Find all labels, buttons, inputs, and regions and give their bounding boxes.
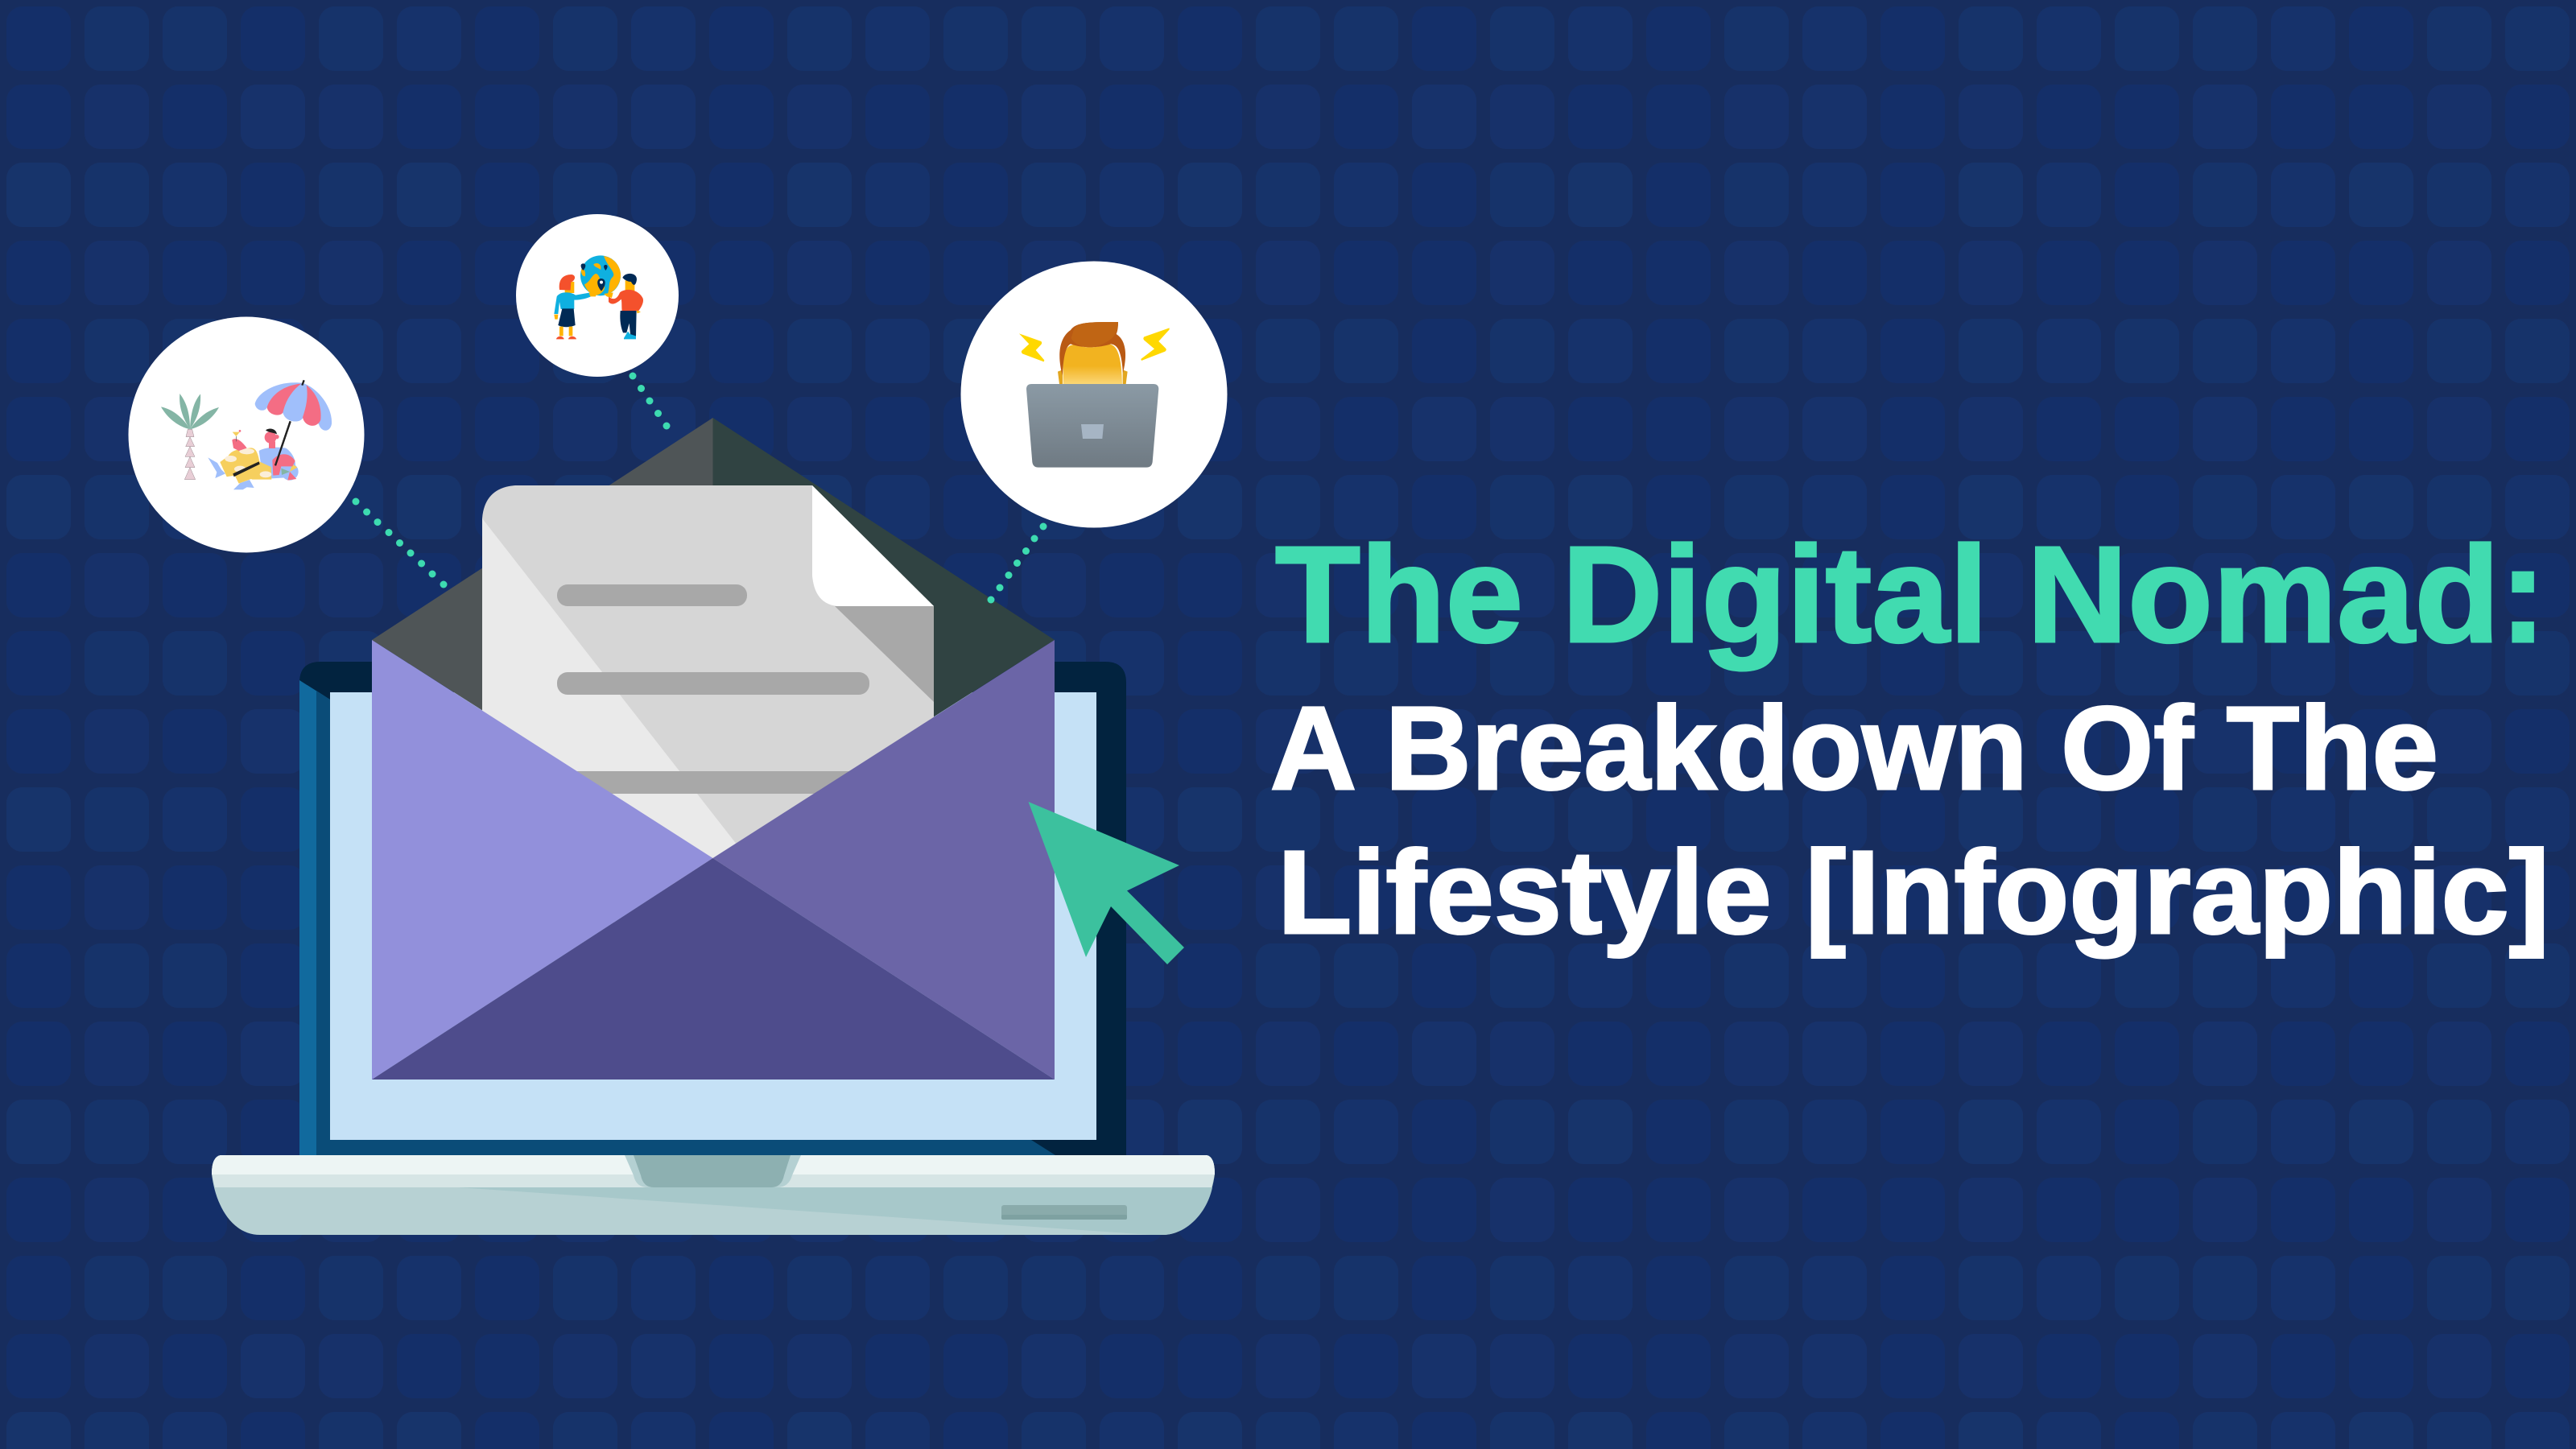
reclining man [208,421,299,489]
envelope back flap [372,418,1055,857]
icon: two people and a globe [554,255,643,339]
envelope front flaps [372,640,1055,1080]
palm tree [161,394,219,480]
title line 2: A Breakdown Of The [1270,683,2438,815]
icon: stressed worker [1019,322,1170,468]
title line 1: The Digital Nomad: [1275,518,2546,671]
laptop screen bezel [299,662,1126,1155]
dotted connector: right [987,523,1046,604]
globe [580,255,621,295]
dotted connector: left [353,497,448,588]
laptop illustration [212,662,1215,1235]
icon: palm and man under umbrella [161,380,332,489]
worker laptop [1026,384,1158,468]
lightning bolts [1019,328,1170,361]
icon: laptop worker circle [961,261,1227,528]
dotted connector: middle [630,372,670,430]
worker head [1058,322,1128,384]
title [1270,518,2549,959]
title line 3: Lifestyle [Infographic] [1278,827,2549,959]
beach umbrella [255,380,332,465]
envelope [372,418,1055,1080]
laptop left side bands [299,680,1055,1155]
man [604,274,643,339]
cursor arrow [1029,802,1184,964]
woman [554,275,597,339]
laptop base [212,1155,1215,1235]
laptop screen [330,692,1096,1140]
letter paper [482,485,934,886]
icon: globe circle [516,214,679,377]
icon: beach circle [129,317,364,552]
